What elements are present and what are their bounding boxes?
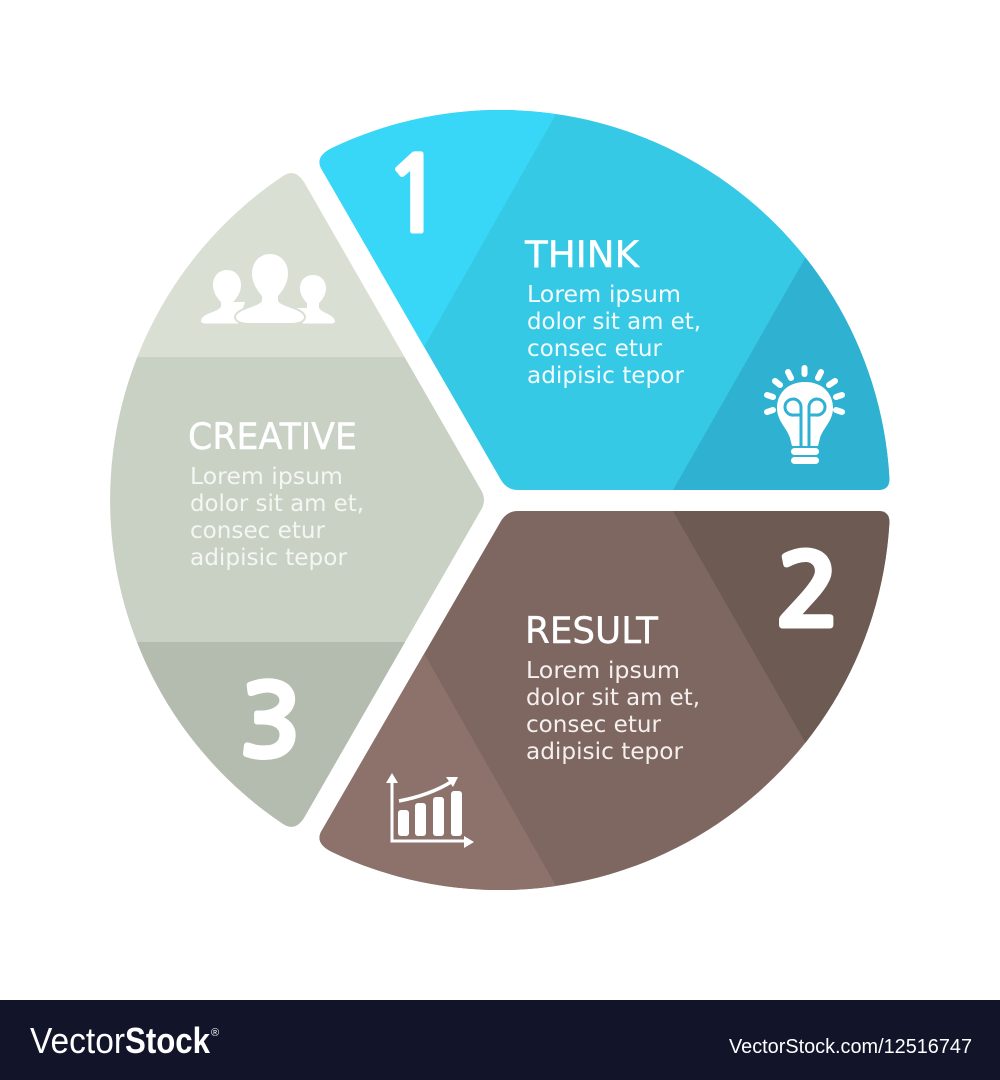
heading: think: THINK <box>524 233 640 276</box>
icon: people group <box>201 254 335 324</box>
text block: result body: Lorem ipsum <box>526 658 680 684</box>
footer logo <box>30 1020 219 1061</box>
panel: step 3 creative <box>110 173 484 827</box>
text block: think body: adipisic tepor <box>527 363 685 389</box>
number 2: 2 <box>775 542 841 641</box>
text block: creative body: consec etur <box>190 518 326 544</box>
text block: think body: dolor sit am et, <box>527 309 701 335</box>
text block: result body: dolor sit am et, <box>526 685 700 711</box>
icon: growth chart <box>386 773 474 848</box>
text block: result body <box>526 658 700 765</box>
icon: light bulb <box>767 368 842 464</box>
footer url: VectorStock.com/12516747 <box>729 1036 972 1058</box>
number 1: 1 <box>382 144 446 248</box>
text block: think body: Lorem ipsum <box>527 282 681 308</box>
panel: step 2 result <box>300 500 900 900</box>
text block: creative body: dolor sit am et, <box>190 491 364 517</box>
footer logo: Stock <box>125 1020 211 1061</box>
text block: result body: adipisic tepor <box>526 739 684 765</box>
footer logo: ® <box>211 1027 219 1039</box>
footer logo: Vector <box>30 1020 125 1061</box>
number 3: 3 <box>239 673 302 772</box>
text block: creative body: Lorem ipsum <box>190 464 343 490</box>
panel: step 1 think <box>300 100 900 500</box>
text block: think body <box>527 282 701 389</box>
text block: creative body: adipisic tepor <box>190 545 348 571</box>
heading: result: RESULT <box>525 609 659 652</box>
text block: result body: consec etur <box>526 712 662 738</box>
heading: creative: CREATIVE <box>188 415 357 458</box>
text block: creative body <box>190 464 364 571</box>
footer bar <box>0 1000 1000 1080</box>
text block: think body: consec etur <box>527 336 663 362</box>
